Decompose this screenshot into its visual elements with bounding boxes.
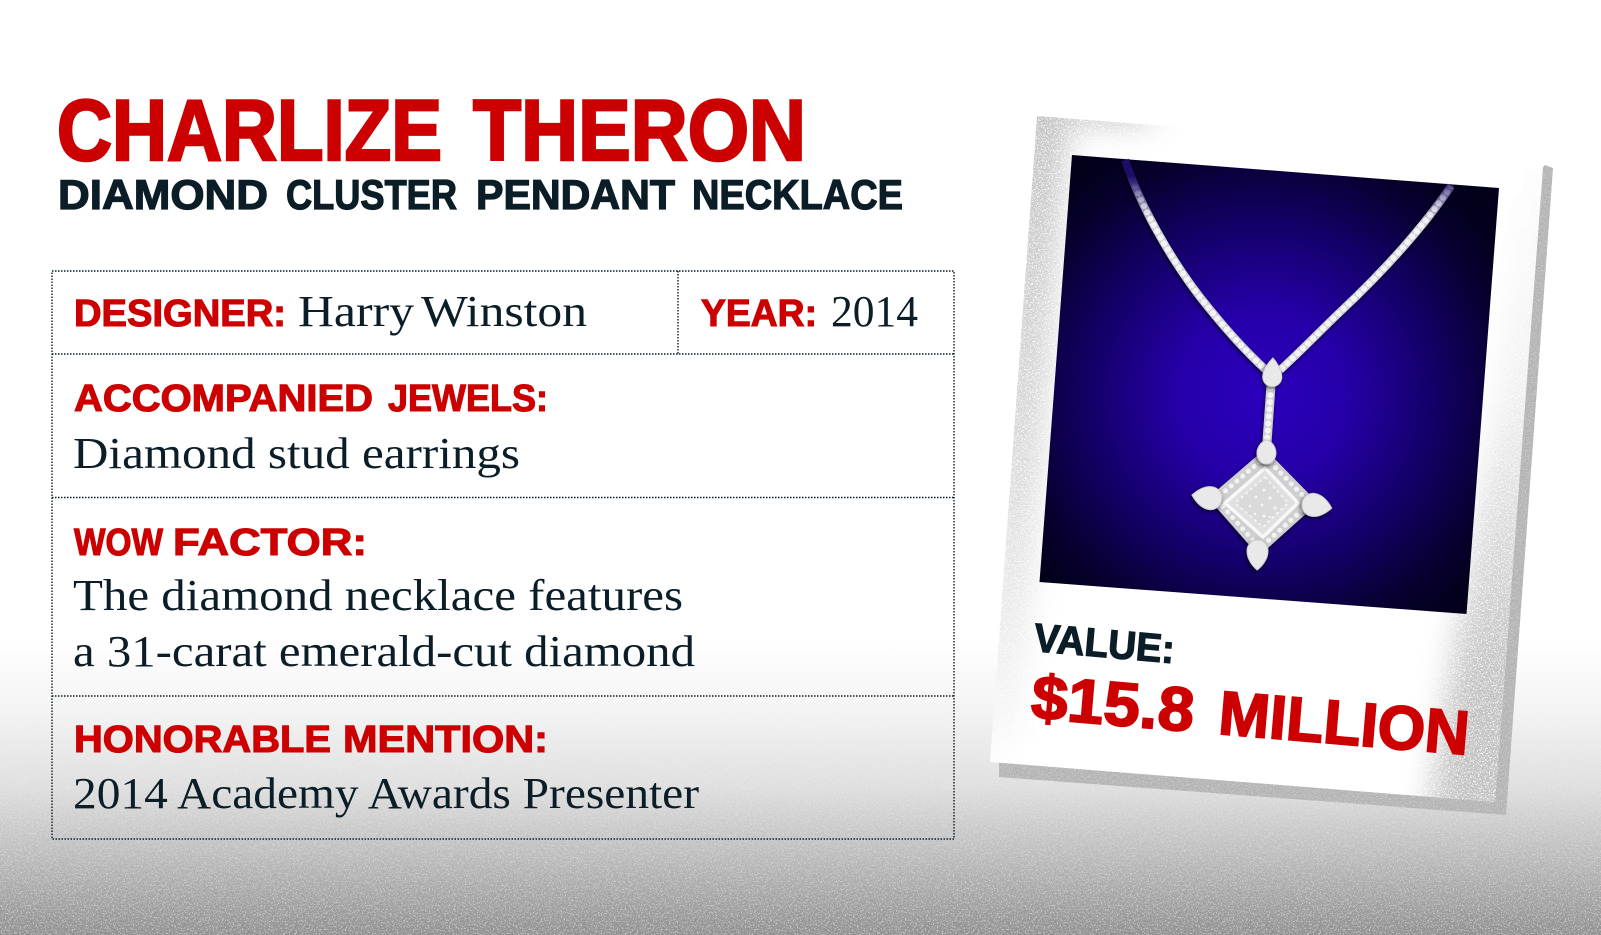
necklace illustration xyxy=(1125,160,1451,570)
row: designer: Winston xyxy=(421,287,587,336)
row: wow factor: FACTOR: xyxy=(173,522,367,564)
row: honorable mention: 2014 Academy Awards Presenter xyxy=(73,769,699,818)
row: honorable mention: MENTION: xyxy=(343,719,548,761)
background: grainy grey gradient xyxy=(0,690,1601,935)
title: Charlize Theron: THERON xyxy=(473,83,806,179)
card shadow xyxy=(990,150,1560,820)
details table xyxy=(52,271,954,839)
pendant diamond xyxy=(1208,449,1318,556)
row: wow factor: The diamond necklace features xyxy=(73,571,683,620)
subtitle: necklace name: CLUSTER xyxy=(286,171,457,218)
row: wow factor xyxy=(73,522,695,676)
row: accompanied jewels: JEWELS: xyxy=(388,378,548,420)
row: year xyxy=(701,287,918,336)
subtitle: necklace name: PENDANT xyxy=(476,171,675,218)
row: year: YEAR: xyxy=(701,293,817,335)
row: designer: Harry xyxy=(298,287,414,336)
row: year: 2014 xyxy=(831,287,918,336)
title: Charlize Theron xyxy=(57,83,806,179)
subtitle: necklace name: DIAMOND xyxy=(58,171,268,218)
title: Charlize Theron: CHARLIZE xyxy=(57,83,442,179)
row: wow factor: a 31-carat emerald-cut diamond xyxy=(73,627,695,676)
row: wow factor: WOW xyxy=(74,522,163,564)
subtitle: necklace name: NECKLACE xyxy=(692,171,903,218)
row: designer: DESIGNER: xyxy=(74,293,286,335)
row: accompanied jewels: ACCOMPANIED xyxy=(74,378,373,420)
subtitle: necklace name xyxy=(58,171,903,218)
polaroid card xyxy=(980,100,1560,820)
value amount: MILLION xyxy=(1216,679,1472,769)
row: designer xyxy=(74,287,587,336)
row: honorable mention: HONORABLE xyxy=(74,719,331,761)
value amount: $15.8 xyxy=(1029,663,1197,746)
row: accompanied jewels: Diamond stud earrings xyxy=(73,429,520,478)
value label: VALUE: xyxy=(1032,616,1177,672)
row: accompanied jewels xyxy=(73,378,548,478)
photo background xyxy=(1040,155,1499,614)
row: honorable mention xyxy=(73,719,699,818)
pear-shaped stones xyxy=(1190,358,1334,570)
value amount xyxy=(1029,663,1472,769)
necklace chain xyxy=(1125,160,1451,442)
card body xyxy=(980,100,1560,820)
